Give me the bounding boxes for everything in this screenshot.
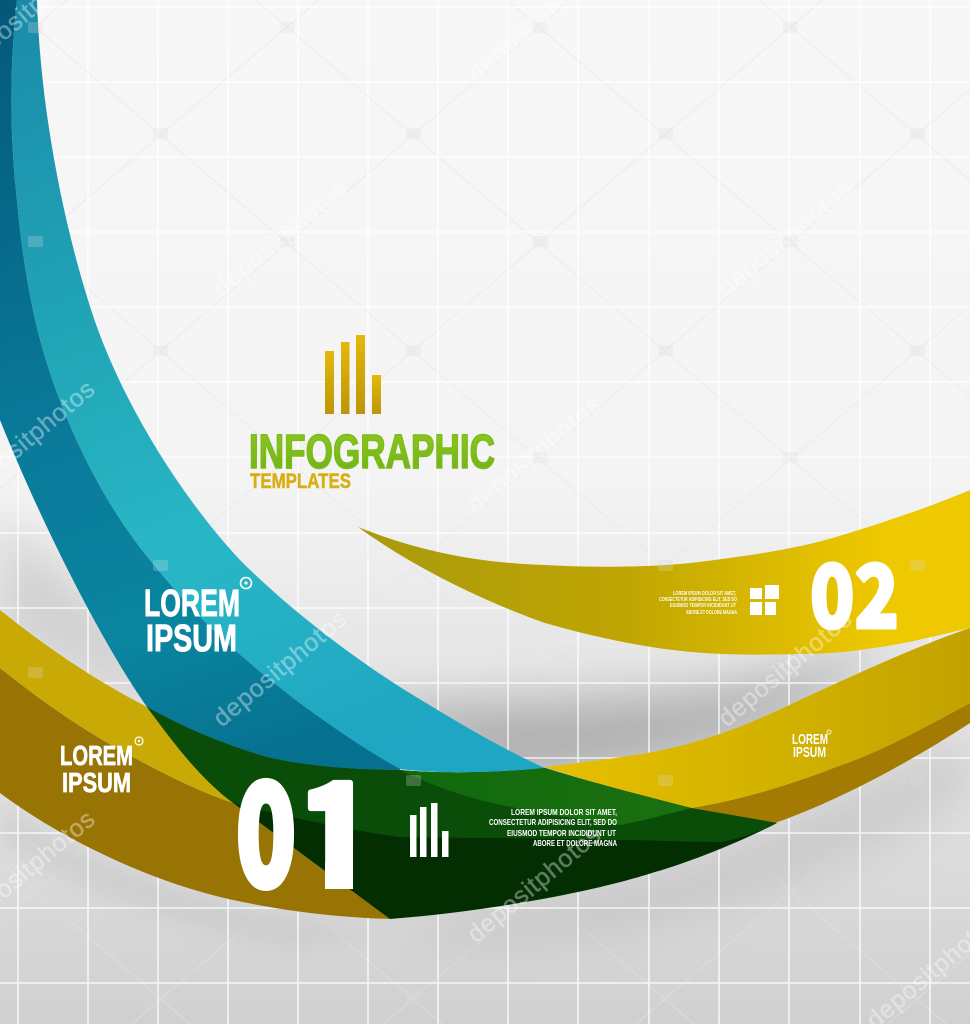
icon: white bar chart (410, 803, 448, 857)
band: teal light (11, 0, 545, 772)
heading: teal lorem ipsum: IPSUM (146, 618, 237, 660)
watermarks: depositphotos (713, 175, 857, 303)
text block: 01 description: CONSECTETUR ADIPISICING ELIT, SED DO (489, 817, 617, 827)
text block: 01 description: ABORE ET DOLORE MAGNA (533, 838, 617, 848)
text block: 01 description: EIUSMOD TEMPOR INCIDIDUNT UT (507, 828, 617, 838)
soft shadows (0, 510, 970, 945)
number 01: 0 (236, 721, 296, 927)
number 01: 1 (298, 721, 375, 927)
title: INFOGRAPHIC (249, 426, 495, 479)
text block: 02 description (659, 591, 737, 616)
watermarks: depositphotos (462, 391, 606, 519)
heading: teal lorem ipsum: LOREM (144, 583, 240, 625)
icon: registered circle small (827, 730, 831, 734)
band: green overlap (147, 707, 777, 919)
text block: 01 description: LOREM IPSUM DOLOR SIT AMET, (511, 807, 617, 817)
heading: teal lorem ipsum (144, 583, 240, 660)
heading: small lorem ipsum (792, 732, 828, 761)
heading: small lorem ipsum: IPSUM (793, 745, 826, 761)
text block: 02 description: ABORE ET DOLORE MAGNA (686, 610, 737, 616)
text block: 01 description (489, 807, 617, 848)
icon: registered circle teal (240, 578, 252, 588)
band: teal dark (0, 0, 400, 770)
text block: 02 description: EIUSMOD TEMPOR INCIDIDUNT UT (670, 603, 736, 609)
icon: title bar chart (325, 335, 381, 414)
band: lower gold right and brown strip (545, 628, 970, 823)
watermarks: depositphotos (462, 821, 606, 949)
heading: brown lorem ipsum (60, 740, 133, 798)
icon: window grid (750, 585, 779, 615)
watermarks: depositphotos (208, 175, 352, 303)
icon: registered circle brown (135, 737, 143, 745)
subtitle: TEMPLATES (250, 470, 351, 493)
heading: small lorem ipsum: LOREM (792, 732, 828, 748)
number 02: 02 (810, 527, 899, 654)
heading: brown lorem ipsum: IPSUM (62, 767, 131, 798)
watermarks: depositphotos (713, 605, 857, 733)
band: top gold 02 (358, 490, 970, 655)
band: left yellow and brown (0, 610, 390, 919)
text block: 02 description: LOREM IPSUM DOLOR SIT AMET, (673, 591, 736, 597)
watermarks: depositphotos (208, 605, 352, 733)
text block: 02 description: CONSECTETUR ADIPISICING ELIT, SED DO (659, 597, 737, 603)
number 01 (238, 778, 354, 891)
heading: brown lorem ipsum: LOREM (60, 740, 133, 771)
